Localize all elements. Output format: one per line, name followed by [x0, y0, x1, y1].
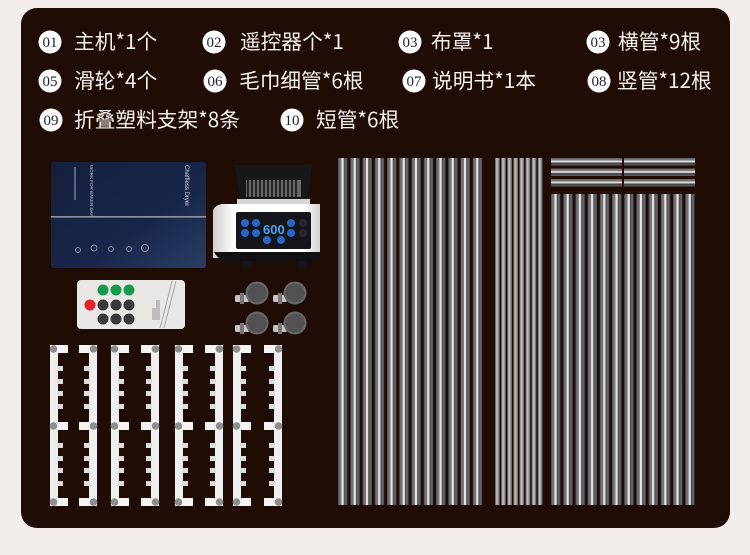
item label: 06 towel tubes: 06	[208, 74, 223, 90]
item label: 03 horizontal tubes: 横管*9根	[618, 25, 701, 55]
item label: 10 short tubes: 短管*6根	[316, 103, 399, 133]
wheels	[235, 282, 306, 334]
remote control	[77, 280, 185, 329]
item label: 03 cover: 布罩*1	[431, 25, 494, 55]
item label: 05 wheels: 滑轮*4个	[74, 64, 158, 94]
tubes: 12 long tubes	[338, 158, 482, 505]
tubes: 12 vertical tubes	[551, 194, 695, 505]
item label: 03 cover: 03	[402, 35, 418, 51]
main unit: 600	[263, 222, 285, 237]
item label: 09 folding brackets: 折叠塑料支架*8条	[74, 103, 240, 133]
item label: 05 wheels: 05	[42, 74, 58, 90]
item label: 01 main unit: 01	[42, 35, 58, 51]
item label: 01 main unit	[38, 25, 158, 55]
item label: 05 wheels	[38, 64, 158, 94]
item label: 07 manual: 说明书*1本	[432, 64, 536, 94]
main unit	[213, 165, 320, 268]
item label: 07 manual: 07	[406, 74, 422, 90]
manual: WORK FOR BAKER DAY	[89, 165, 94, 216]
folding plastic brackets	[50, 345, 282, 506]
item label: 02 remote: 遥控器个*1	[240, 25, 344, 55]
manual: Chaffless Dryer	[183, 165, 189, 206]
tubes: horizontal short tubes	[551, 158, 695, 186]
item label: 08 vertical tubes: 08	[592, 74, 606, 90]
item label: 03 cover	[398, 25, 494, 55]
item label: 02 remote: 02	[206, 35, 222, 51]
tubes: 8 thin tubes	[495, 158, 542, 505]
item label: 01 main unit: 主机*1个	[74, 25, 158, 55]
item label: 03 horizontal tubes: 03	[590, 35, 606, 51]
item label: 06 towel tubes: 毛巾细管*6根	[239, 64, 364, 94]
manual	[51, 162, 206, 268]
item label: 09 folding brackets: 09	[44, 113, 58, 129]
item label: 08 vertical tubes: 竖管*12根	[617, 64, 712, 94]
item label: 10 short tubes: 10	[284, 113, 300, 129]
